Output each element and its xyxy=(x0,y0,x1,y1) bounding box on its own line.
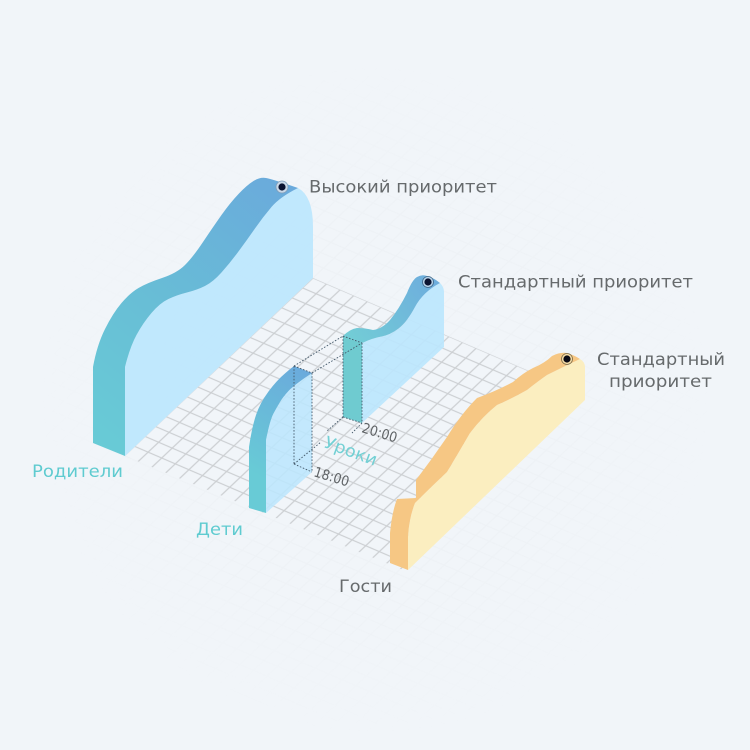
label: guests: Гости xyxy=(339,577,392,597)
label: standard priority guests: Стандартный xyxy=(597,350,725,370)
wall: guests xyxy=(390,353,585,570)
label: parents: Родители xyxy=(32,462,123,482)
dotted homework box xyxy=(294,336,362,472)
children evening light face xyxy=(266,373,312,513)
guests thick edge xyxy=(390,353,580,570)
label: homework: Уроки xyxy=(321,433,380,471)
children evening thick edge xyxy=(249,366,312,513)
label: children: Дети xyxy=(196,520,243,540)
homework block xyxy=(343,336,362,423)
children night thick edge xyxy=(343,275,440,343)
main floor grid xyxy=(125,278,536,572)
label: standard priority guests: приоритет xyxy=(609,372,712,392)
label: standard priority guests xyxy=(597,350,725,392)
parents light face xyxy=(125,188,313,456)
wall: children xyxy=(249,275,444,513)
parents thick edge xyxy=(93,178,298,456)
marker: parents xyxy=(276,181,288,193)
label: 18:00: 18:00 xyxy=(312,465,351,490)
label: standard priority children: Стандартный приоритет xyxy=(458,272,693,292)
label: 20:00: 20:00 xyxy=(360,421,399,446)
marker: children xyxy=(422,276,434,288)
children night light face xyxy=(362,283,444,423)
guests light face xyxy=(408,359,585,570)
wall: parents xyxy=(93,178,313,456)
label: high priority: Высокий приоритет xyxy=(309,178,497,198)
marker: guests xyxy=(562,354,572,364)
